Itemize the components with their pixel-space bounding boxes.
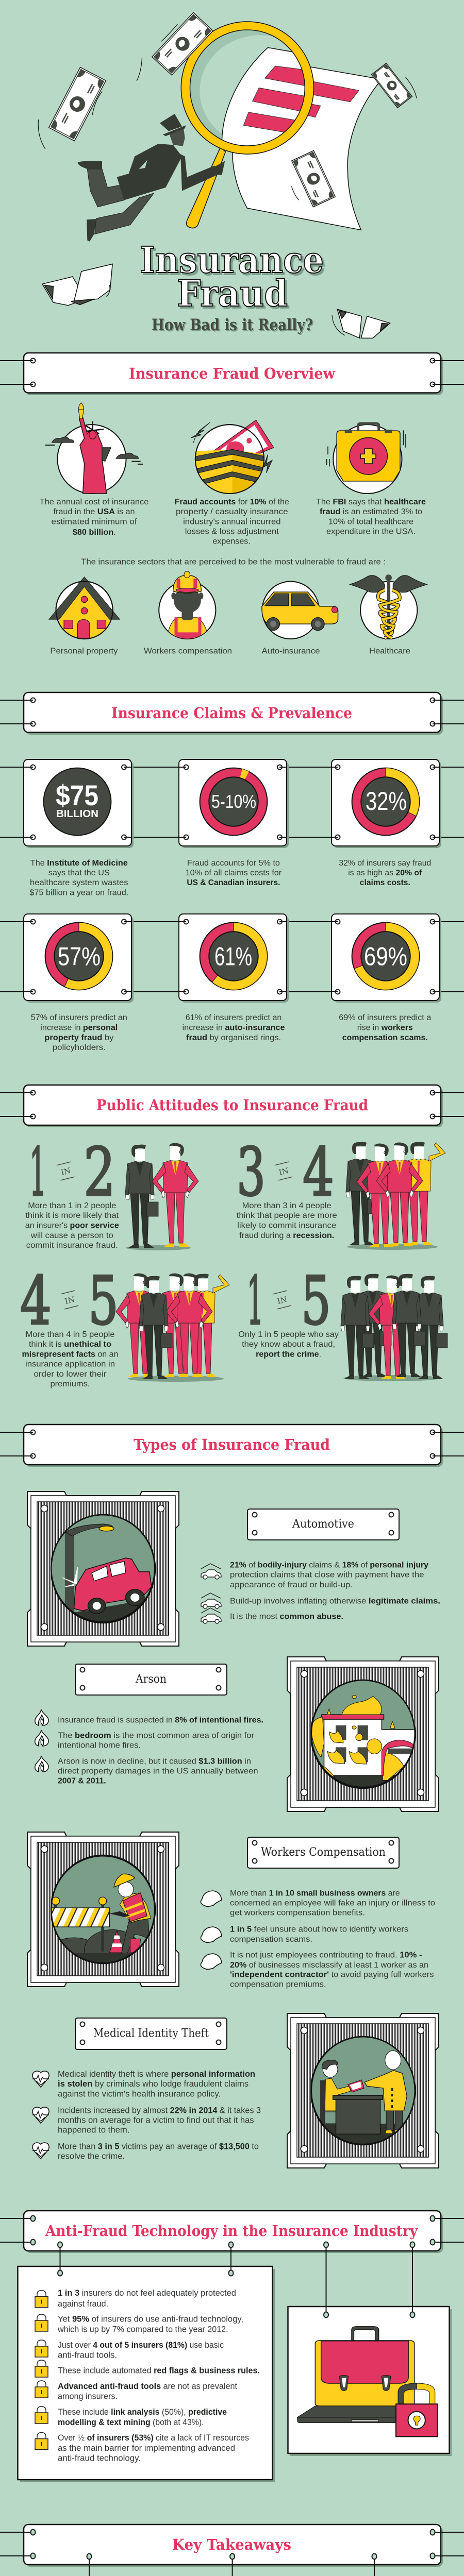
list: automotive facts: appearance of fraud or build-up.	[230, 1581, 353, 1589]
stat: 4 in 5: misrepresent facts on an	[22, 1350, 118, 1359]
icon: caduceus	[350, 574, 427, 639]
stat: 1 in 2: IN	[60, 1166, 72, 1177]
stat: 4 in 5: think it is unethical to	[29, 1340, 111, 1349]
list: medical identity theft facts: resolve the crime.	[58, 2151, 125, 2161]
stat: 3 in 4: likely to commit insurance	[237, 1221, 336, 1230]
text: row two captions: increase in personal	[40, 1024, 118, 1032]
heading: Public Attitudes to Insurance Fraud	[0, 1085, 464, 1127]
stat: 3 in 4: 3	[237, 1134, 266, 1211]
list: automotive facts	[201, 1561, 440, 1623]
list: medical identity theft facts: Medical identity theft is where personal information	[58, 2069, 255, 2079]
text: overview stats: expenses.	[212, 537, 251, 546]
cards: prevalence stat row one: $75	[56, 779, 98, 811]
text: overview stats: property / casualty insurance	[176, 507, 288, 516]
list: medical identity theft facts: months on average for a victim to find out that it has	[58, 2115, 254, 2125]
text: overview stats: losses & loss adjustment	[185, 528, 279, 536]
text: row two captions: compensation scams.	[342, 1033, 428, 1042]
cards: prevalence stat row one	[0, 759, 464, 848]
panel: anti-fraud facts: These include link analysis (50%), predictive	[58, 2407, 227, 2417]
text: row two captions: 57% of insurers predict an	[31, 1013, 127, 1022]
stat: 4 in 5: 4	[20, 1263, 52, 1340]
panel: anti-fraud facts: These include automated red flags & business rules.	[58, 2366, 260, 2375]
title: Fraud	[177, 272, 288, 315]
cards: prevalence stat row two: 61%	[214, 942, 252, 971]
stat: 4 in 5: IN	[64, 1295, 76, 1306]
heading: Insurance Fraud Overview: Insurance Fraud Overview	[129, 365, 336, 382]
list: workers compensation facts: 1 in 5 feel unsure about how to identify workers	[230, 1925, 408, 1934]
stat: 1 in 5: Only 1 in 5 people who say	[238, 1330, 339, 1339]
icons: flying banknotes	[38, 12, 417, 338]
list: workers compensation facts: 'independent contractor' to avoid paying full workers	[230, 1970, 434, 1979]
text: row two captions: increase in auto-insurance	[183, 1024, 285, 1032]
label: Automotive	[247, 1509, 399, 1540]
panel: automotive illustration	[27, 1492, 179, 1646]
text: overview stats: $80 billion.	[73, 528, 116, 537]
heading: Key Takeaways	[0, 2524, 464, 2567]
panel: anti-fraud facts: modelling & text mining (both at 43%).	[58, 2417, 204, 2427]
stat: 4 in 5: More than 4 in 5 people	[26, 1330, 115, 1339]
list: arson facts: The bedroom is the most common area of origin for	[58, 1732, 255, 1740]
text: overview stats: fraud in the USA is an	[54, 507, 135, 516]
label: Medical Identity Theft: Medical Identity Theft	[93, 2027, 209, 2040]
label: Workers Compensation: Workers Compensation	[261, 1846, 386, 1859]
stat: 4 in 5: insurance application in	[25, 1360, 115, 1369]
icon: car	[262, 582, 338, 639]
panel: secured briefcase laptop illustration	[288, 2242, 452, 2456]
stat: 1 in 2: will cause a person to	[30, 1231, 113, 1240]
panel: anti-fraud facts: as the main barrier for implementing advanced	[58, 2443, 235, 2453]
stat: 3 in 4: 4	[303, 1134, 334, 1211]
stat: 1 in 2: an insurer's poor service	[25, 1221, 119, 1230]
heading: Key Takeaways: Key Takeaways	[172, 2536, 291, 2553]
stat: 1 in 5: 1	[247, 1263, 263, 1340]
label: Arson: Arson	[135, 1673, 167, 1686]
text: overview stats	[39, 498, 426, 546]
list: arson facts: Arson is now in decline, but it caused $1.3 billion in	[58, 1757, 251, 1766]
text: overview stats: industry's annual incurred	[183, 517, 280, 526]
stat: 3 in 4: IN	[278, 1166, 290, 1177]
text: overview stats: estimated minimum of	[52, 517, 137, 526]
panel: anti-fraud facts: anti-fraud technology.	[58, 2453, 141, 2463]
list: workers compensation facts: More than 1 in 10 small business owners are	[230, 1889, 400, 1898]
icon: construction worker	[159, 571, 216, 639]
stat: 4 in 5: premiums.	[51, 1380, 90, 1388]
list: workers compensation facts: compensation scams.	[230, 1935, 312, 1944]
panel: workers compensation illustration	[27, 1832, 179, 1987]
text: row one captions: The Institute of Medicine	[30, 859, 128, 868]
text: row one captions: $75 billion a year on fraud.	[29, 888, 128, 897]
list: medical identity theft facts	[32, 2069, 261, 2161]
heading: Types of Insurance Fraud: Types of Insurance Fraud	[134, 1436, 330, 1453]
heading: Insurance Claims & Prevalence: Insurance Claims & Prevalence	[111, 704, 352, 722]
stat: 1 in 2	[25, 1134, 198, 1250]
list: workers compensation facts: get workers compensation benefits.	[230, 1908, 365, 1917]
text: row one captions	[29, 859, 431, 897]
list: arson facts	[35, 1709, 263, 1786]
subtitle: How Bad is it Really?	[152, 316, 313, 334]
stat: 3 in 4	[237, 1134, 445, 1250]
text: row one captions: 32% of insurers say fraud	[339, 859, 431, 868]
text: sector labels	[50, 647, 410, 655]
list: automotive facts: It is the most common abuse.	[230, 1612, 343, 1621]
panel: arson illustration	[287, 1657, 439, 1811]
panel: anti-fraud facts: anti-fraud tools.	[58, 2350, 117, 2360]
text: row two captions: policyholders.	[53, 1043, 106, 1052]
panel: anti-fraud facts: which is up by 7% compared to the year 2012.	[57, 2325, 228, 2334]
takeaway: open padlock tag	[29, 2553, 146, 2576]
icon: house	[49, 577, 120, 641]
list: arson facts: intentional home fires.	[58, 1741, 141, 1750]
heading: Public Attitudes to Insurance Fraud: Public Attitudes to Insurance Fraud	[96, 1096, 368, 1114]
panel: anti-fraud facts: Advanced anti-fraud tools are not as prevalent	[58, 2381, 237, 2391]
text: vulnerable sectors intro: The insurance sectors that are perceived to be the most vulnerable to fraud are :	[81, 557, 386, 567]
list: workers compensation facts: compensation premiums.	[230, 1980, 326, 1989]
cards: prevalence stat row one: 5-10%	[211, 791, 256, 812]
stat: 3 in 4: fraud during a recession.	[239, 1231, 334, 1240]
panel: anti-fraud facts: 1 in 3 insurers do not feel adequately protected	[58, 2288, 236, 2298]
stat: 1 in 2: 2	[84, 1134, 115, 1211]
icon: banknote in pocket	[191, 420, 274, 496]
text: row two captions: 61% of insurers predict an	[186, 1013, 281, 1022]
stat: 3 in 4: More than 3 in 4 people	[242, 1201, 332, 1210]
list: workers compensation facts	[201, 1889, 435, 1989]
stat: 1 in 5: IN	[276, 1295, 288, 1306]
list: automotive facts: Build-up involves inflating otherwise legitimate claims.	[230, 1597, 440, 1605]
text: overview stats: 10% of total healthcare	[328, 517, 413, 526]
text: overview stats: The FBI says that healthcare	[316, 498, 426, 506]
takeaway: megaphone tag	[314, 2553, 437, 2576]
text: row one captions: says that the US	[48, 869, 110, 877]
label: Arson	[75, 1664, 227, 1695]
text: sector labels: Personal property	[50, 647, 118, 655]
list: workers compensation facts: 20% of businesses misclassify at least 1 worker as an	[230, 1961, 428, 1970]
stat: 1 in 5: report the crime.	[256, 1350, 321, 1359]
illustration: hero fraudster with magnifying glass and document	[77, 22, 382, 242]
stat: 4 in 5: order to lower their	[34, 1370, 107, 1379]
heading: Anti-Fraud Technology in the Insurance Industry: Anti-Fraud Technology in the Insurance Industry	[45, 2222, 418, 2240]
stat: 1 in 5	[238, 1263, 448, 1381]
text: row one captions: claims costs.	[360, 878, 410, 887]
heading: Types of Insurance Fraud	[0, 1425, 464, 1467]
text: row one captions: is as high as 20% of	[348, 869, 422, 877]
cards: prevalence stat row one: 32%	[366, 787, 407, 816]
text: row two captions: rise in workers	[357, 1024, 413, 1032]
heading: Anti-Fraud Technology in the Insurance Industry	[0, 2211, 464, 2253]
icon: statue of liberty	[45, 403, 143, 494]
panel: anti-fraud facts: Just over 4 out of 5 insurers (81%) use basic	[58, 2340, 224, 2350]
title	[140, 239, 324, 315]
heading: Insurance Fraud Overview	[0, 353, 464, 395]
text: row two captions	[31, 1013, 431, 1052]
icon: first aid kit	[327, 423, 406, 494]
stat: 4 in 5	[20, 1263, 229, 1388]
heading: Insurance Claims & Prevalence	[0, 692, 464, 735]
list: automotive facts: 21% of bodily-injury claims & 18% of personal injury	[230, 1561, 428, 1569]
text: row two captions: 69% of insurers predict a	[339, 1013, 431, 1022]
text: sector labels: Workers compensation	[144, 647, 232, 655]
cards: prevalence stat row two: 57%	[58, 942, 101, 971]
text: overview stats: expenditure in the USA.	[326, 528, 416, 536]
panel: medical identity theft illustration	[287, 2013, 439, 2168]
list: medical identity theft facts: happened to them.	[58, 2125, 130, 2135]
title: Insurance	[140, 239, 324, 281]
list: automotive facts: protection claims that close with payment have the	[230, 1571, 424, 1580]
label: Medical Identity Theft	[75, 2018, 227, 2049]
text: sector labels: Healthcare	[369, 647, 410, 655]
list: workers compensation facts: concerned an employee will fake an injury or illness to	[230, 1899, 435, 1908]
text: row one captions: healthcare system wastes	[30, 878, 128, 887]
stat: 1 in 5: they know about a fraud,	[242, 1340, 335, 1349]
text: overview stats: Fraud accounts for 10% of the	[175, 498, 289, 506]
text: overview stats: fraud is an estimated 3% to	[320, 507, 422, 516]
stat: 1 in 2: 1	[29, 1134, 46, 1211]
text: row two captions: property fraud by	[44, 1033, 113, 1042]
cards: prevalence stat row two: 69%	[364, 942, 407, 971]
panel: anti-fraud facts: Yet 95% of insurers do use anti-fraud technology,	[58, 2314, 243, 2324]
list: arson facts: 2007 & 2011.	[58, 1777, 106, 1786]
text: row one captions: Fraud accounts for 5% to	[187, 859, 280, 868]
stat: 3 in 4: think that people are more	[237, 1211, 337, 1220]
stat: 1 in 2: commit insurance fraud.	[26, 1241, 118, 1250]
panel: anti-fraud facts	[18, 2242, 275, 2482]
stat: 1 in 2: More than 1 in 2 people	[28, 1201, 116, 1210]
list: arson facts: Insurance fraud is suspected in 8% of intentional fires.	[58, 1716, 263, 1725]
takeaway: monitor with gears tag	[174, 2553, 290, 2576]
text: row two captions: fraud by organised rings.	[186, 1033, 281, 1042]
list: medical identity theft facts: against the victim's health insurance policy.	[58, 2089, 221, 2099]
stat: 4 in 5: 5	[88, 1263, 119, 1340]
cards: prevalence stat row two	[0, 914, 464, 1003]
cards: prevalence stat row one: BILLION	[56, 808, 98, 820]
panel: anti-fraud facts: against fraud.	[58, 2299, 108, 2309]
list: arson facts: direct property damages in the US annually between	[58, 1767, 258, 1775]
text: row one captions: 10% of all claims costs for	[186, 869, 282, 877]
list: workers compensation facts: It is not just employees contributing to fraud. 10% -	[230, 1951, 422, 1960]
text: row one captions: US & Canadian insurers.	[187, 878, 280, 887]
panel: anti-fraud facts: Over ½ of insurers (53%) cite a lack of IT resources	[58, 2433, 249, 2443]
list: medical identity theft facts: Incidents increased by almost 22% in 2014 & it takes 3	[58, 2105, 261, 2115]
text: sector labels: Auto-insurance	[262, 647, 320, 655]
stat: 1 in 5: 5	[301, 1263, 331, 1340]
text: overview stats: The annual cost of insurance	[39, 498, 149, 506]
stat: 1 in 2: think it is more likely that	[25, 1211, 119, 1220]
label: Automotive: Automotive	[292, 1518, 354, 1531]
list: medical identity theft facts: is stolen by criminals who lodge fraudulent claims	[58, 2079, 248, 2089]
label: Workers Compensation	[247, 1837, 399, 1868]
list: medical identity theft facts: More than 3 in 5 victims pay an average of $13,500 to	[58, 2141, 259, 2151]
panel: anti-fraud facts: among insurers.	[58, 2392, 118, 2401]
